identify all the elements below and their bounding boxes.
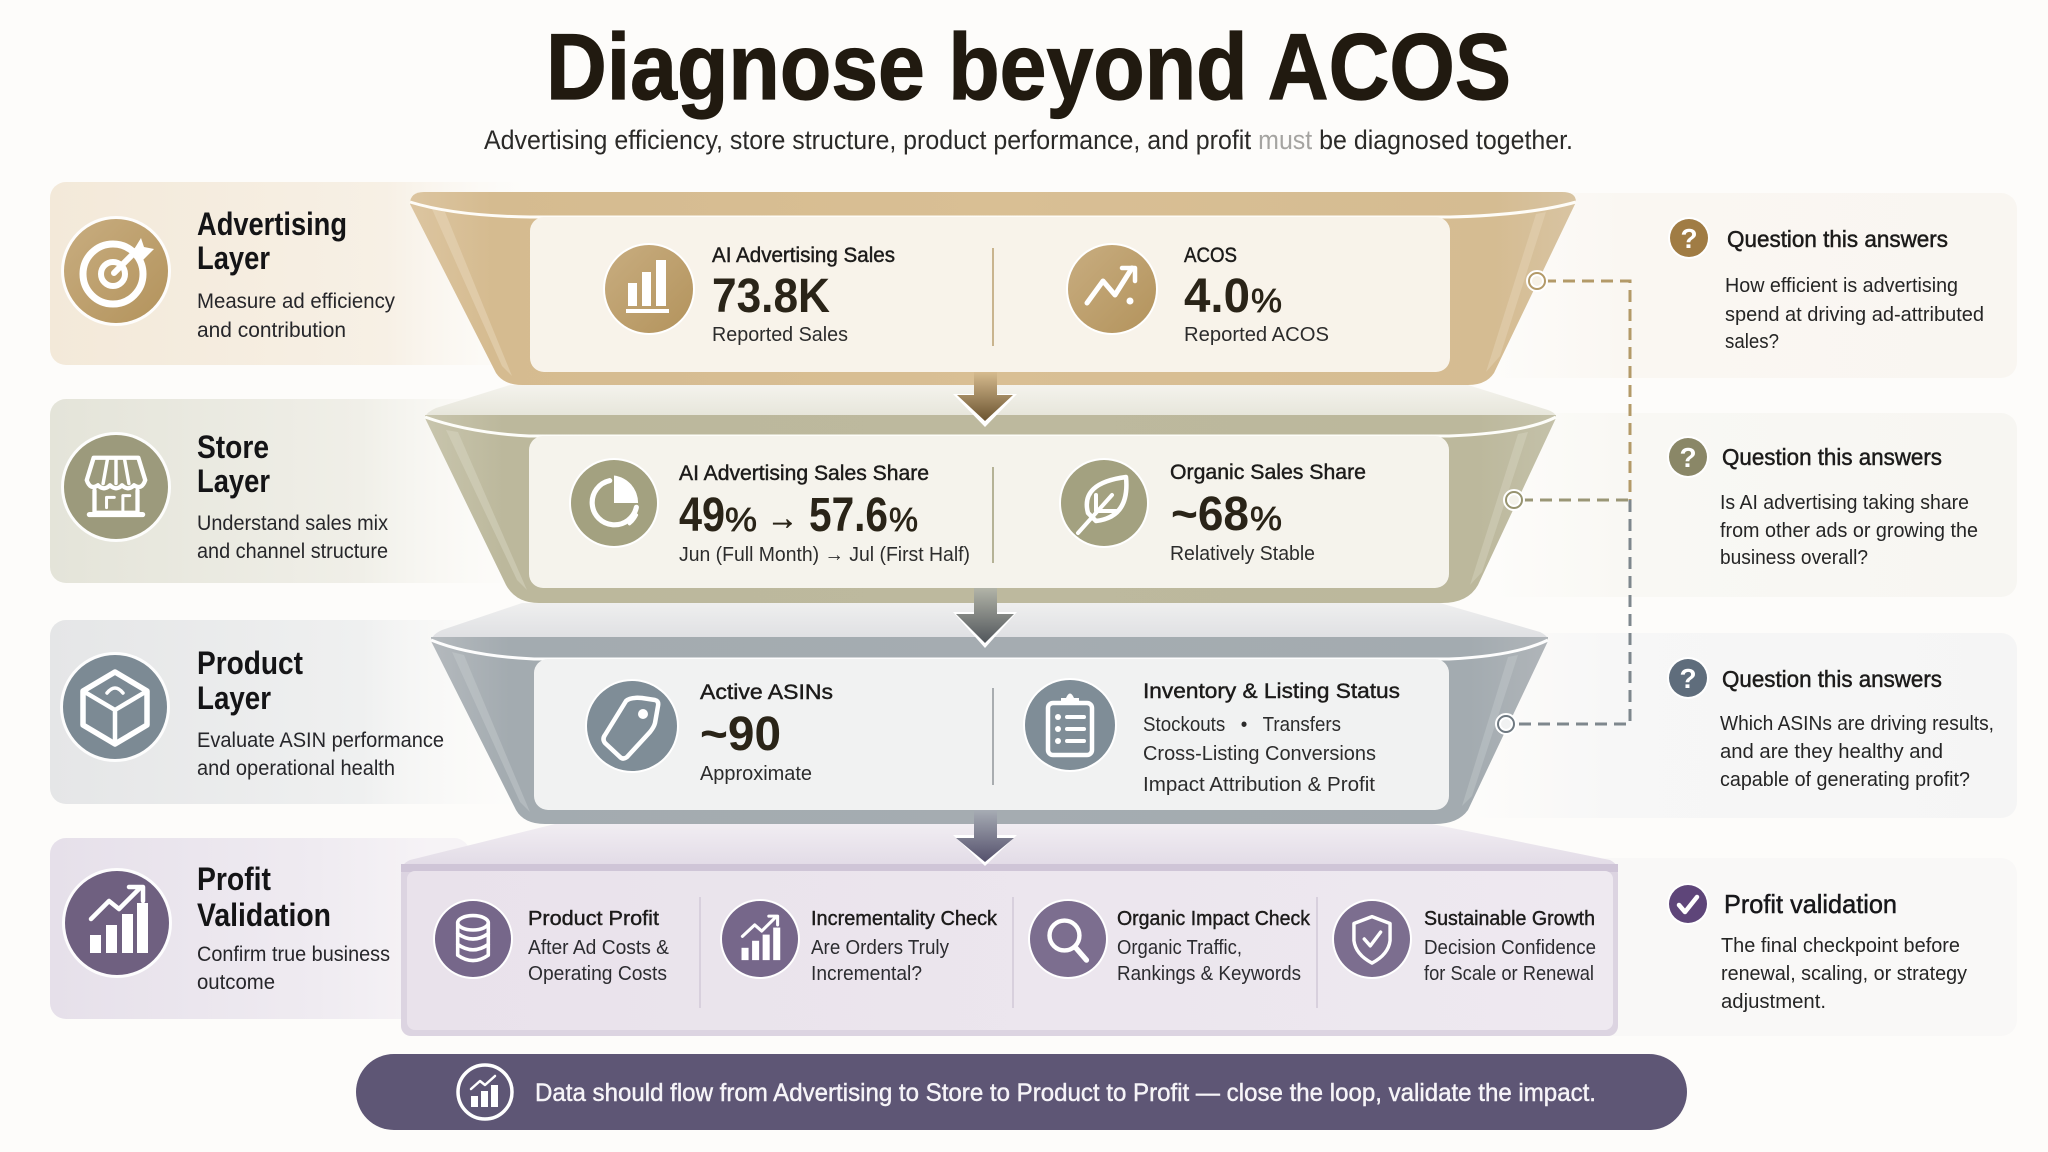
- arrow: store to product: [953, 588, 1017, 648]
- body line 3: capable of generating profit?: [1720, 769, 1970, 791]
- description: Measure ad efficiency: [197, 290, 395, 313]
- body: The final checkpoint before: [1721, 935, 1960, 957]
- metric: inventory and listing status: [1023, 678, 1400, 796]
- metric: AI advertising sales share: 57.6: [809, 489, 888, 542]
- icon: box: [60, 652, 170, 762]
- panel: question store: [1490, 413, 2017, 597]
- heading: Question this answers: [1722, 444, 1942, 470]
- icon: chart in ring: [458, 1065, 512, 1119]
- heading: Question this answers: [1722, 666, 1942, 692]
- metric: sustainable growth: Sustainable Growth: [1424, 908, 1595, 930]
- panel: store layer: [50, 399, 530, 583]
- metric: product profit: [433, 899, 670, 985]
- metric: AI advertising sales share: [569, 458, 970, 566]
- connector: dashed questions link: [1498, 273, 1630, 732]
- heading line 2: Validation: [197, 897, 331, 933]
- metric: product profit: After Ad Costs &: [528, 937, 670, 959]
- metric: product profit: Product Profit: [528, 908, 659, 930]
- metric: organic impact check: [1028, 899, 1311, 985]
- metric: incrementality check: [720, 899, 998, 985]
- metric: organic impact check: Rankings & Keywords: [1117, 963, 1301, 985]
- icon: question: [1668, 217, 1710, 259]
- body line 2: spend at driving ad-attributed: [1725, 304, 1984, 326]
- heading line 2: Layer: [197, 463, 270, 499]
- funnel tier 4: profit: [401, 824, 1618, 1036]
- icon: check: [1667, 883, 1709, 925]
- metric: inventory and listing status: Inventory & Listing Status: [1143, 680, 1400, 703]
- icon: rising bars: [62, 868, 172, 978]
- description line 2: and contribution: [197, 319, 346, 342]
- description: Understand sales mix: [197, 512, 388, 535]
- metric: active ASINs: ~90: [700, 708, 781, 761]
- description: Confirm true business: [197, 943, 390, 966]
- metric: organic sales share: Relatively Stable: [1170, 543, 1315, 565]
- funnel tier 3: product: [431, 603, 1548, 824]
- heading: Profit: [197, 861, 271, 897]
- body: Which ASINs are driving results,: [1720, 713, 1994, 735]
- heading: Store: [197, 429, 269, 465]
- panel: advertising layer: [50, 182, 530, 365]
- panel: question product: [1470, 633, 2017, 818]
- metric: product profit: Operating Costs: [528, 963, 667, 985]
- metric: incrementality check: Incrementality Check: [811, 908, 998, 930]
- body line 2: and are they healthy and: [1720, 741, 1943, 763]
- metric: organic impact check: Organic Impact Check: [1117, 908, 1311, 930]
- heading: Advertising: [197, 206, 347, 242]
- metric: AI advertising sales share: →: [767, 499, 798, 536]
- metric: sustainable growth: Decision Confidence: [1424, 937, 1596, 959]
- metric: incrementality check: Are Orders Truly: [811, 937, 949, 959]
- icon: question: [1667, 436, 1709, 478]
- funnel tier 2: store: [425, 385, 1556, 603]
- metric: AI advertising sales: 73.8K: [712, 270, 830, 323]
- metric: ACOS: 4.0: [1184, 270, 1250, 323]
- subtitle: Advertising efficiency, store structure, product performance, and profit must be diagnosed together.: [484, 125, 1573, 155]
- arrow: product to profit: [953, 810, 1017, 866]
- title: Diagnose beyond ACOS: [546, 14, 1511, 119]
- heading: Question this answers: [1727, 226, 1948, 252]
- metric: active ASINs: [585, 679, 833, 785]
- metric: sustainable growth: for Scale or Renewal: [1424, 963, 1594, 985]
- body line 2: from other ads or growing the: [1720, 520, 1978, 542]
- panel: profit validation: [50, 838, 470, 1019]
- metric: active ASINs: Approximate: [700, 763, 812, 785]
- metric: inventory and listing status: Impact Attribution & Profit: [1143, 774, 1375, 796]
- metric: inventory and listing status: Cross-Listing Conversions: [1143, 743, 1376, 765]
- metric: organic sales share: [1059, 458, 1366, 565]
- icon: storefront: [61, 432, 171, 542]
- metric: AI advertising sales: [603, 243, 895, 346]
- banner: [356, 1054, 1687, 1130]
- metric: organic sales share: Organic Sales Share: [1170, 461, 1366, 484]
- icon: question: [1667, 657, 1709, 699]
- icon: question: ?: [1679, 442, 1697, 473]
- description line 2: and operational health: [197, 757, 395, 780]
- icon: question: ?: [1679, 663, 1697, 694]
- banner text: Data should flow from Advertising to Store to Product to Profit — close the loop, validate the impact.: [535, 1079, 1596, 1107]
- metric: AI advertising sales: AI Advertising Sales: [712, 244, 895, 267]
- panel: product layer: [50, 620, 530, 804]
- metric: ACOS: ACOS: [1184, 244, 1237, 267]
- metric: ACOS: %: [1251, 282, 1282, 319]
- metric: ACOS: Reported ACOS: [1184, 324, 1329, 346]
- panel: profit validation note: [1590, 858, 2017, 1036]
- arrow: advertising to store: [953, 372, 1017, 427]
- heading line 2: Layer: [197, 680, 271, 716]
- metric: inventory and listing status: Stockouts • Transfers: [1143, 714, 1341, 736]
- description: Evaluate ASIN performance: [197, 729, 444, 752]
- metric: incrementality check: Incremental?: [811, 963, 922, 985]
- metric: ACOS: [1066, 243, 1329, 346]
- panel: question advertising: [1490, 193, 2017, 378]
- metric: AI advertising sales share: Jun (Full Month) → Jul (First Half): [679, 544, 970, 566]
- body line 2: renewal, scaling, or strategy: [1721, 963, 1967, 985]
- icon: question: ?: [1680, 223, 1698, 254]
- metric: AI advertising sales share: %: [725, 501, 757, 538]
- description line 2: and channel structure: [197, 540, 388, 563]
- heading line 2: Layer: [197, 240, 270, 276]
- metric: organic sales share: %: [1250, 500, 1282, 537]
- funnel tier 1: advertising: [410, 192, 1576, 385]
- icon: target: [61, 216, 171, 326]
- metric: organic sales share: ~68: [1171, 488, 1249, 541]
- heading: Product: [197, 645, 303, 681]
- body line 3: business overall?: [1720, 547, 1868, 569]
- metric: active ASINs: Active ASINs: [700, 681, 833, 704]
- heading: Profit validation: [1724, 889, 1897, 919]
- body line 3: adjustment.: [1721, 991, 1826, 1013]
- body: How efficient is advertising: [1725, 275, 1958, 297]
- body: Is AI advertising taking share: [1720, 492, 1969, 514]
- metric: AI advertising sales: Reported Sales: [712, 324, 848, 346]
- description line 2: outcome: [197, 971, 275, 994]
- body line 3: sales?: [1725, 331, 1779, 353]
- metric: AI advertising sales share: AI Advertising Sales Share: [679, 462, 929, 485]
- metric: organic impact check: Organic Traffic,: [1117, 937, 1242, 959]
- metric: AI advertising sales share: 49: [679, 489, 725, 542]
- metric: sustainable growth: [1332, 899, 1596, 985]
- metric: AI advertising sales share: %: [889, 501, 918, 538]
